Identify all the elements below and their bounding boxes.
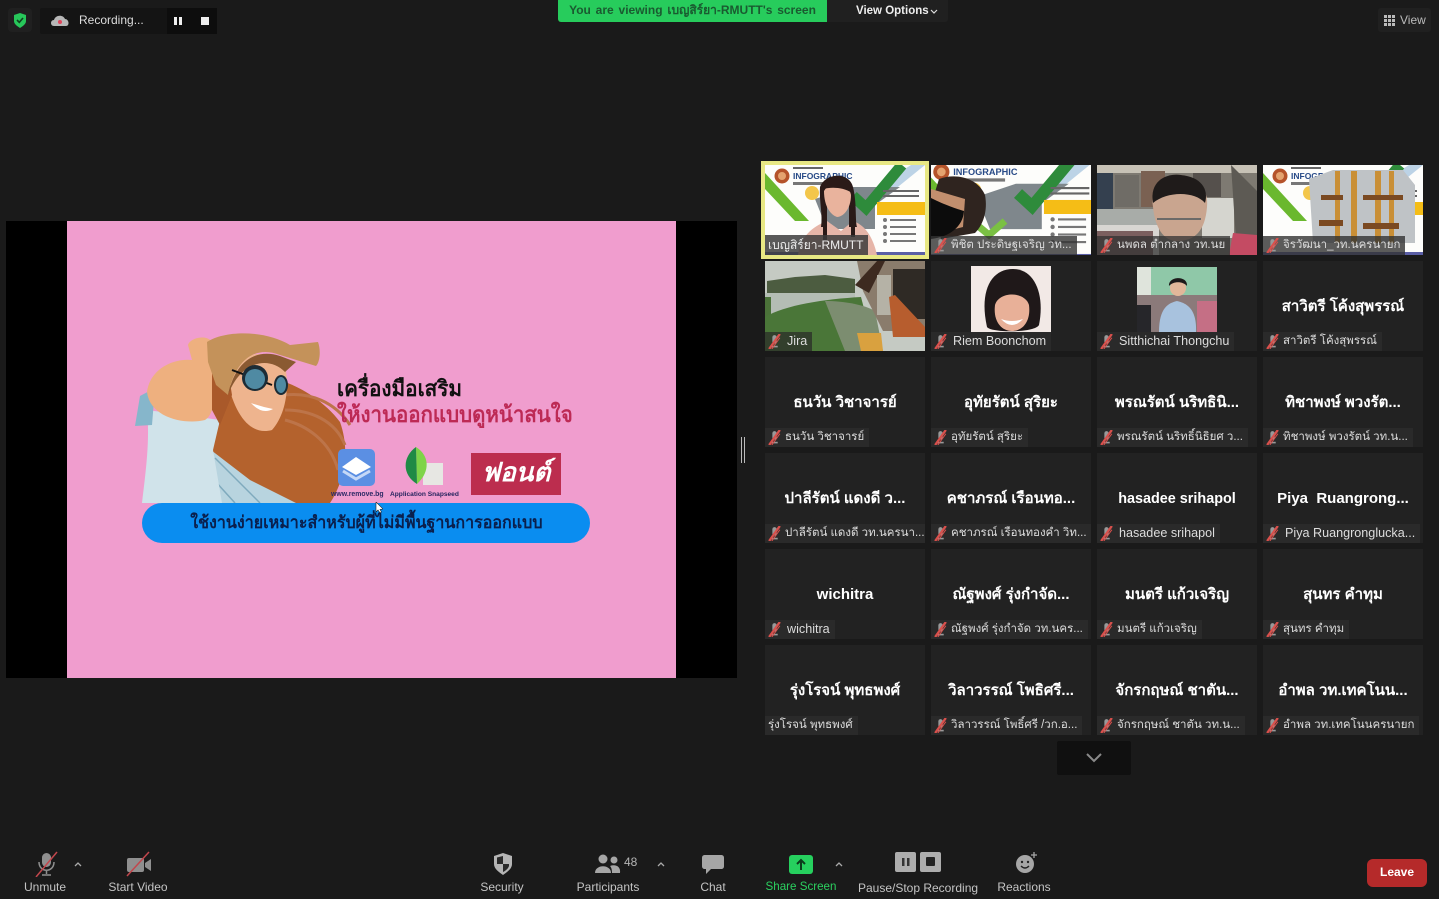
name label: [1097, 332, 1234, 351]
name label: wichitra: [787, 622, 830, 636]
icon: pause and stop recording: [895, 852, 941, 872]
tile: Uthairat: อุทัยรัตน์ สุริยะ: [964, 394, 1058, 411]
tile: Savitri: สาวิตรี โค้งสุพรรณ์: [1282, 298, 1404, 315]
tile: Sunthon: [1263, 549, 1423, 639]
name label: [1097, 716, 1245, 735]
panel resize handle: [741, 437, 745, 463]
participants label: Participants: [577, 880, 639, 894]
tile: Riem Boonchom: [931, 261, 1091, 351]
name label: รุ่งโรจน์ พุทธพงศ์: [768, 719, 853, 731]
tagline pill: ใช้งานง่ายเหมาะสำหรับผู้ที่ไม่มีพื้นฐานการออกแบบ: [190, 513, 542, 532]
tile: wichitra: [765, 549, 925, 639]
name label: Riem Boonchom: [953, 334, 1046, 348]
tile: hasadee: hasadee srihapol: [1118, 491, 1236, 507]
tile: Nattapong: [931, 549, 1091, 639]
icon: security: [494, 853, 512, 875]
icon: participants: [595, 854, 620, 873]
pause stop recording label: Pause/Stop Recording: [858, 881, 978, 895]
logo: Snapseed: [390, 447, 459, 498]
leave button: [1367, 859, 1427, 887]
name label: [1263, 332, 1382, 351]
name label: คชาภรณ์ เรือนทองคำ วิท...: [951, 527, 1087, 539]
tagline pill: [142, 503, 590, 543]
icon: pause and stop: [174, 17, 209, 25]
heading: design subtitle: ให้งานออกแบบดูหน้าสนใจ: [337, 402, 573, 427]
tile: Jakkrit: [1097, 645, 1257, 735]
view options button: View Options: [856, 5, 929, 17]
name label: อุทัยรัตน์ สุริยะ: [951, 431, 1023, 443]
chat label: Chat: [700, 880, 726, 894]
view options button: [827, 0, 948, 22]
logo: font site: ฟอนต์: [482, 457, 550, 487]
tile: Rungroj: รุ่งโรจน์ พุทธพงศ์: [790, 682, 900, 699]
name label: [765, 620, 835, 639]
tile: Savitri: [1263, 261, 1423, 351]
name label: สุนทร คำทุม: [1283, 623, 1344, 635]
panel: participant grid: [765, 165, 1423, 735]
name label: จักรกฤษณ์ ชาตัน วท.น...: [1117, 719, 1240, 731]
name label: ธนวัน วิชาจารย์: [785, 431, 864, 443]
tile: masked man: [931, 165, 1091, 255]
start video label: Start Video: [108, 880, 168, 894]
viewing banner: You are viewing เบญสิร์ยา-RMUTT's screen: [569, 3, 816, 17]
icon: chat: [702, 855, 724, 874]
tile: Thichaphong: ทิชาพงษ์ พวงรัต...: [1285, 394, 1401, 411]
tile: Piya: Piya Ruangrong...: [1277, 490, 1409, 507]
tile: speaker: [765, 165, 925, 255]
name label: จิรวัฒนา_วท.นครนายก: [1283, 239, 1400, 251]
tile: hasadee: [1097, 453, 1257, 543]
name label: นพดล ตำกลาง วท.นย: [1117, 239, 1225, 251]
icon: video off: [126, 852, 151, 876]
name label: ปาลีรัตน์ แดงดี วท.นครนา...: [785, 527, 925, 539]
tile: Rungroj: [765, 645, 925, 735]
name label: [1097, 428, 1248, 447]
name label: พิชิต ประดิษฐเจริญ วท...: [951, 239, 1072, 251]
name label: ณัฐพงศ์ รุ่งกำจัด วท.นคร...: [951, 623, 1083, 635]
tile: Thanawan: ธนวัน วิชาจารย์: [793, 394, 897, 411]
name label: [1097, 620, 1202, 639]
name label: [1263, 620, 1349, 639]
tile: wichitra: wichitra: [817, 586, 873, 603]
logo: font site: [471, 453, 561, 495]
icon: reactions: [1016, 852, 1037, 873]
icon: participants caret: [658, 862, 664, 866]
security shield icon: [8, 8, 32, 32]
tile: gowns: [1263, 165, 1423, 255]
participant count: 48: [624, 855, 637, 869]
reactions label: Reactions: [997, 880, 1051, 894]
share screen label: Share Screen: [766, 880, 836, 893]
next page arrow button: [1057, 741, 1131, 775]
name label: [1097, 524, 1220, 543]
name label: Sitthichai Thongchu: [1119, 334, 1229, 348]
name label: เบญสิร์ยา-RMUTT: [768, 238, 863, 252]
tile: Piya: [1263, 453, 1423, 543]
name label: [1097, 236, 1230, 255]
tile: Nattapong: ณัฐพงศ์ รุ่งกำจัด...: [952, 586, 1070, 603]
tile: Palirat: [765, 453, 925, 543]
tile: Sunthon: สุนทร คำทุม: [1303, 586, 1383, 603]
name label: [1263, 716, 1419, 735]
tile: Jira: [765, 261, 925, 351]
tile: Pornrat: พรณรัตน์ นริทธินิ...: [1115, 394, 1239, 411]
name label: [765, 716, 858, 735]
icon: share caret: [836, 862, 842, 866]
name label: [931, 428, 1028, 447]
icon: share screen: [789, 855, 813, 874]
slide background: [67, 221, 676, 678]
photo: woman in sun hat: [135, 333, 352, 503]
tile: Amphon: [1263, 645, 1423, 735]
tile: Thichaphong: [1263, 357, 1423, 447]
view layout button: [1378, 8, 1431, 32]
heading: tools: เครื่องมือเสริม: [337, 376, 462, 401]
tile: Wilawan: [931, 645, 1091, 735]
name label: มนตรี แก้วเจริญ: [1117, 623, 1197, 635]
leave button: Leave: [1380, 865, 1414, 879]
name label: [931, 236, 1077, 255]
tile: Sitthichai Thongchu: [1097, 261, 1257, 351]
logo: Snapseed: Application Snapseed: [390, 491, 459, 498]
view layout button: View: [1400, 13, 1426, 27]
recording status pill: [40, 8, 217, 34]
name label: [931, 524, 1091, 543]
name label: [1263, 236, 1405, 255]
active speaker highlight: [761, 161, 929, 259]
name label: [765, 524, 925, 543]
name label: สาวิตรี โค้งสุพรรณ์: [1283, 335, 1377, 347]
logo: remove.bg: [331, 449, 384, 498]
name label: ทิชาพงษ์ พวงรัตน์ วท.น...: [1283, 431, 1408, 443]
panel: shared screen slide: [6, 221, 737, 678]
tile: Uthairat: [931, 357, 1091, 447]
logo: remove.bg: www.remove.bg: [331, 491, 384, 498]
name label: [765, 332, 812, 351]
name label: พรณรัตน์ นริทธิ์นิธิยศ ว...: [1117, 431, 1243, 443]
tile: Amphon: อำพล วท.เทคโนน...: [1278, 682, 1408, 699]
name label: วิลาวรรณ์ โพธิ์ศรี /วก.อ...: [951, 719, 1077, 731]
name label: อำพล วท.เทคโนนครนายก: [1283, 719, 1414, 731]
icon: muted microphone: [36, 852, 58, 877]
name label: Jira: [787, 334, 807, 348]
tile: Palirat: ปาลีรัตน์ แดงดี ว...: [785, 490, 905, 507]
name label: [765, 428, 869, 447]
recording label: Recording...: [79, 13, 144, 27]
name label: hasadee srihapol: [1119, 526, 1215, 540]
icon: audio caret: [74, 862, 82, 866]
name label: [765, 235, 868, 255]
name label: [931, 620, 1088, 639]
name label: [931, 332, 1051, 351]
tile: Pornrat: [1097, 357, 1257, 447]
tile: Jakkrit: จักรกฤษณ์ ชาตัน...: [1115, 682, 1239, 699]
viewing banner: [558, 0, 827, 22]
tile: Montri: [1097, 549, 1257, 639]
tile: Wilawan: วิลาวรรณ์ โพธิศรี...: [948, 682, 1074, 699]
name label: Piya Ruangronglucka...: [1285, 526, 1415, 540]
tile: Montri: มนตรี แก้วเจริญ: [1125, 586, 1229, 603]
security label: Security: [480, 880, 524, 894]
unmute label: Unmute: [24, 880, 66, 894]
icon: recording cloud: [51, 16, 68, 26]
name label: [931, 716, 1082, 735]
icon: mouse cursor: [376, 502, 383, 514]
name label: [1263, 428, 1413, 447]
tile: Thanawan: [765, 357, 925, 447]
tile: Kachaporn: [931, 453, 1091, 543]
name label: [1263, 524, 1420, 543]
tile: man in office: [1097, 165, 1257, 255]
tile: Kachaporn: คชาภรณ์ เรือนทอ...: [947, 490, 1075, 507]
